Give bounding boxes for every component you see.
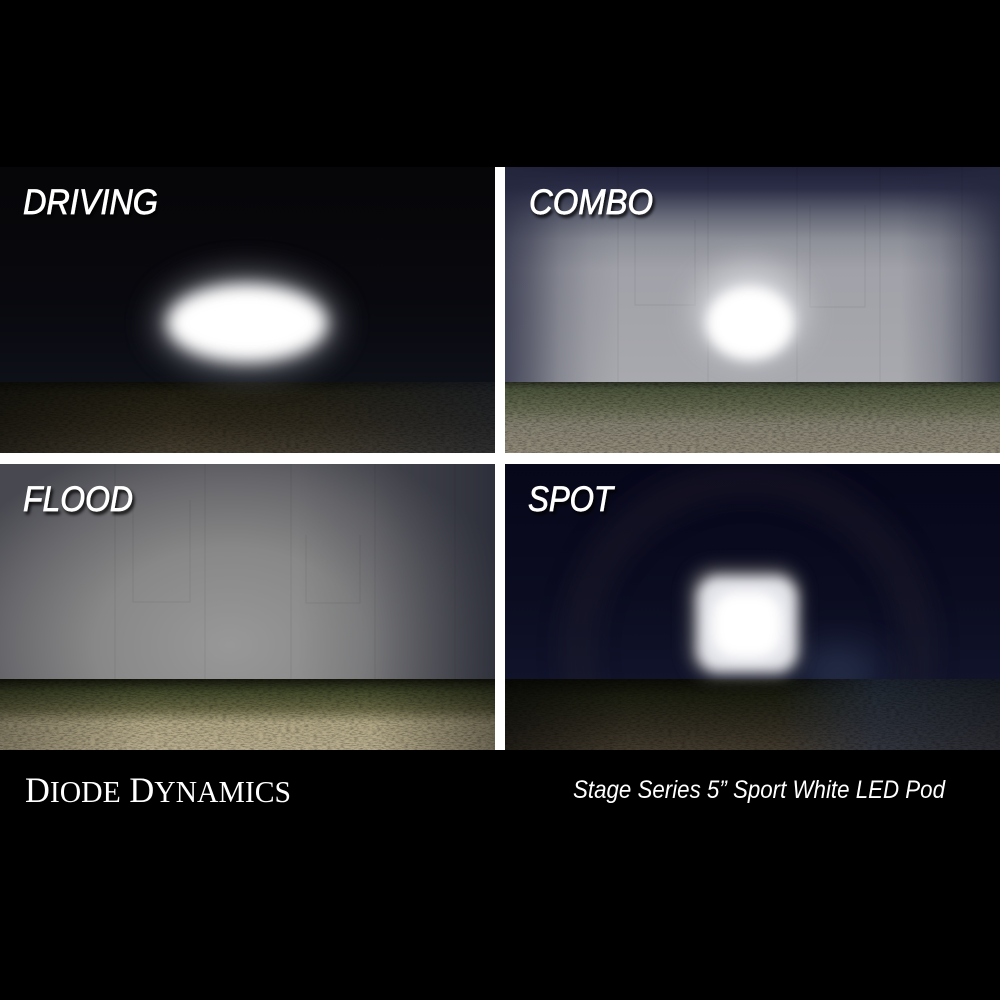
wall: spot (505, 464, 1000, 679)
heading: spot: SPOT (528, 480, 615, 519)
panel: flood (0, 464, 495, 750)
ground: combo (505, 382, 1000, 453)
panel: spot (505, 464, 1000, 750)
white divider frame (0, 167, 1000, 750)
wall: driving (0, 167, 495, 382)
brand logo text: DIODE DYNAMICS (25, 770, 291, 810)
wall: flood (0, 464, 495, 679)
heading: combo: COMBO (529, 183, 653, 222)
panel: driving (0, 167, 495, 453)
ground: flood (0, 679, 495, 750)
panel: combo (505, 167, 1000, 453)
light beam: driving (153, 269, 341, 377)
ground: driving (0, 382, 495, 453)
heading: flood: FLOOD (23, 480, 133, 519)
wall: combo (505, 167, 1000, 382)
light beam: combo (694, 264, 806, 360)
product caption: Stage Series 5” Sport White LED Pod (573, 776, 946, 804)
ground: spot (505, 679, 1000, 750)
light beam: spot (688, 566, 802, 678)
heading: driving: DRIVING (23, 183, 158, 222)
